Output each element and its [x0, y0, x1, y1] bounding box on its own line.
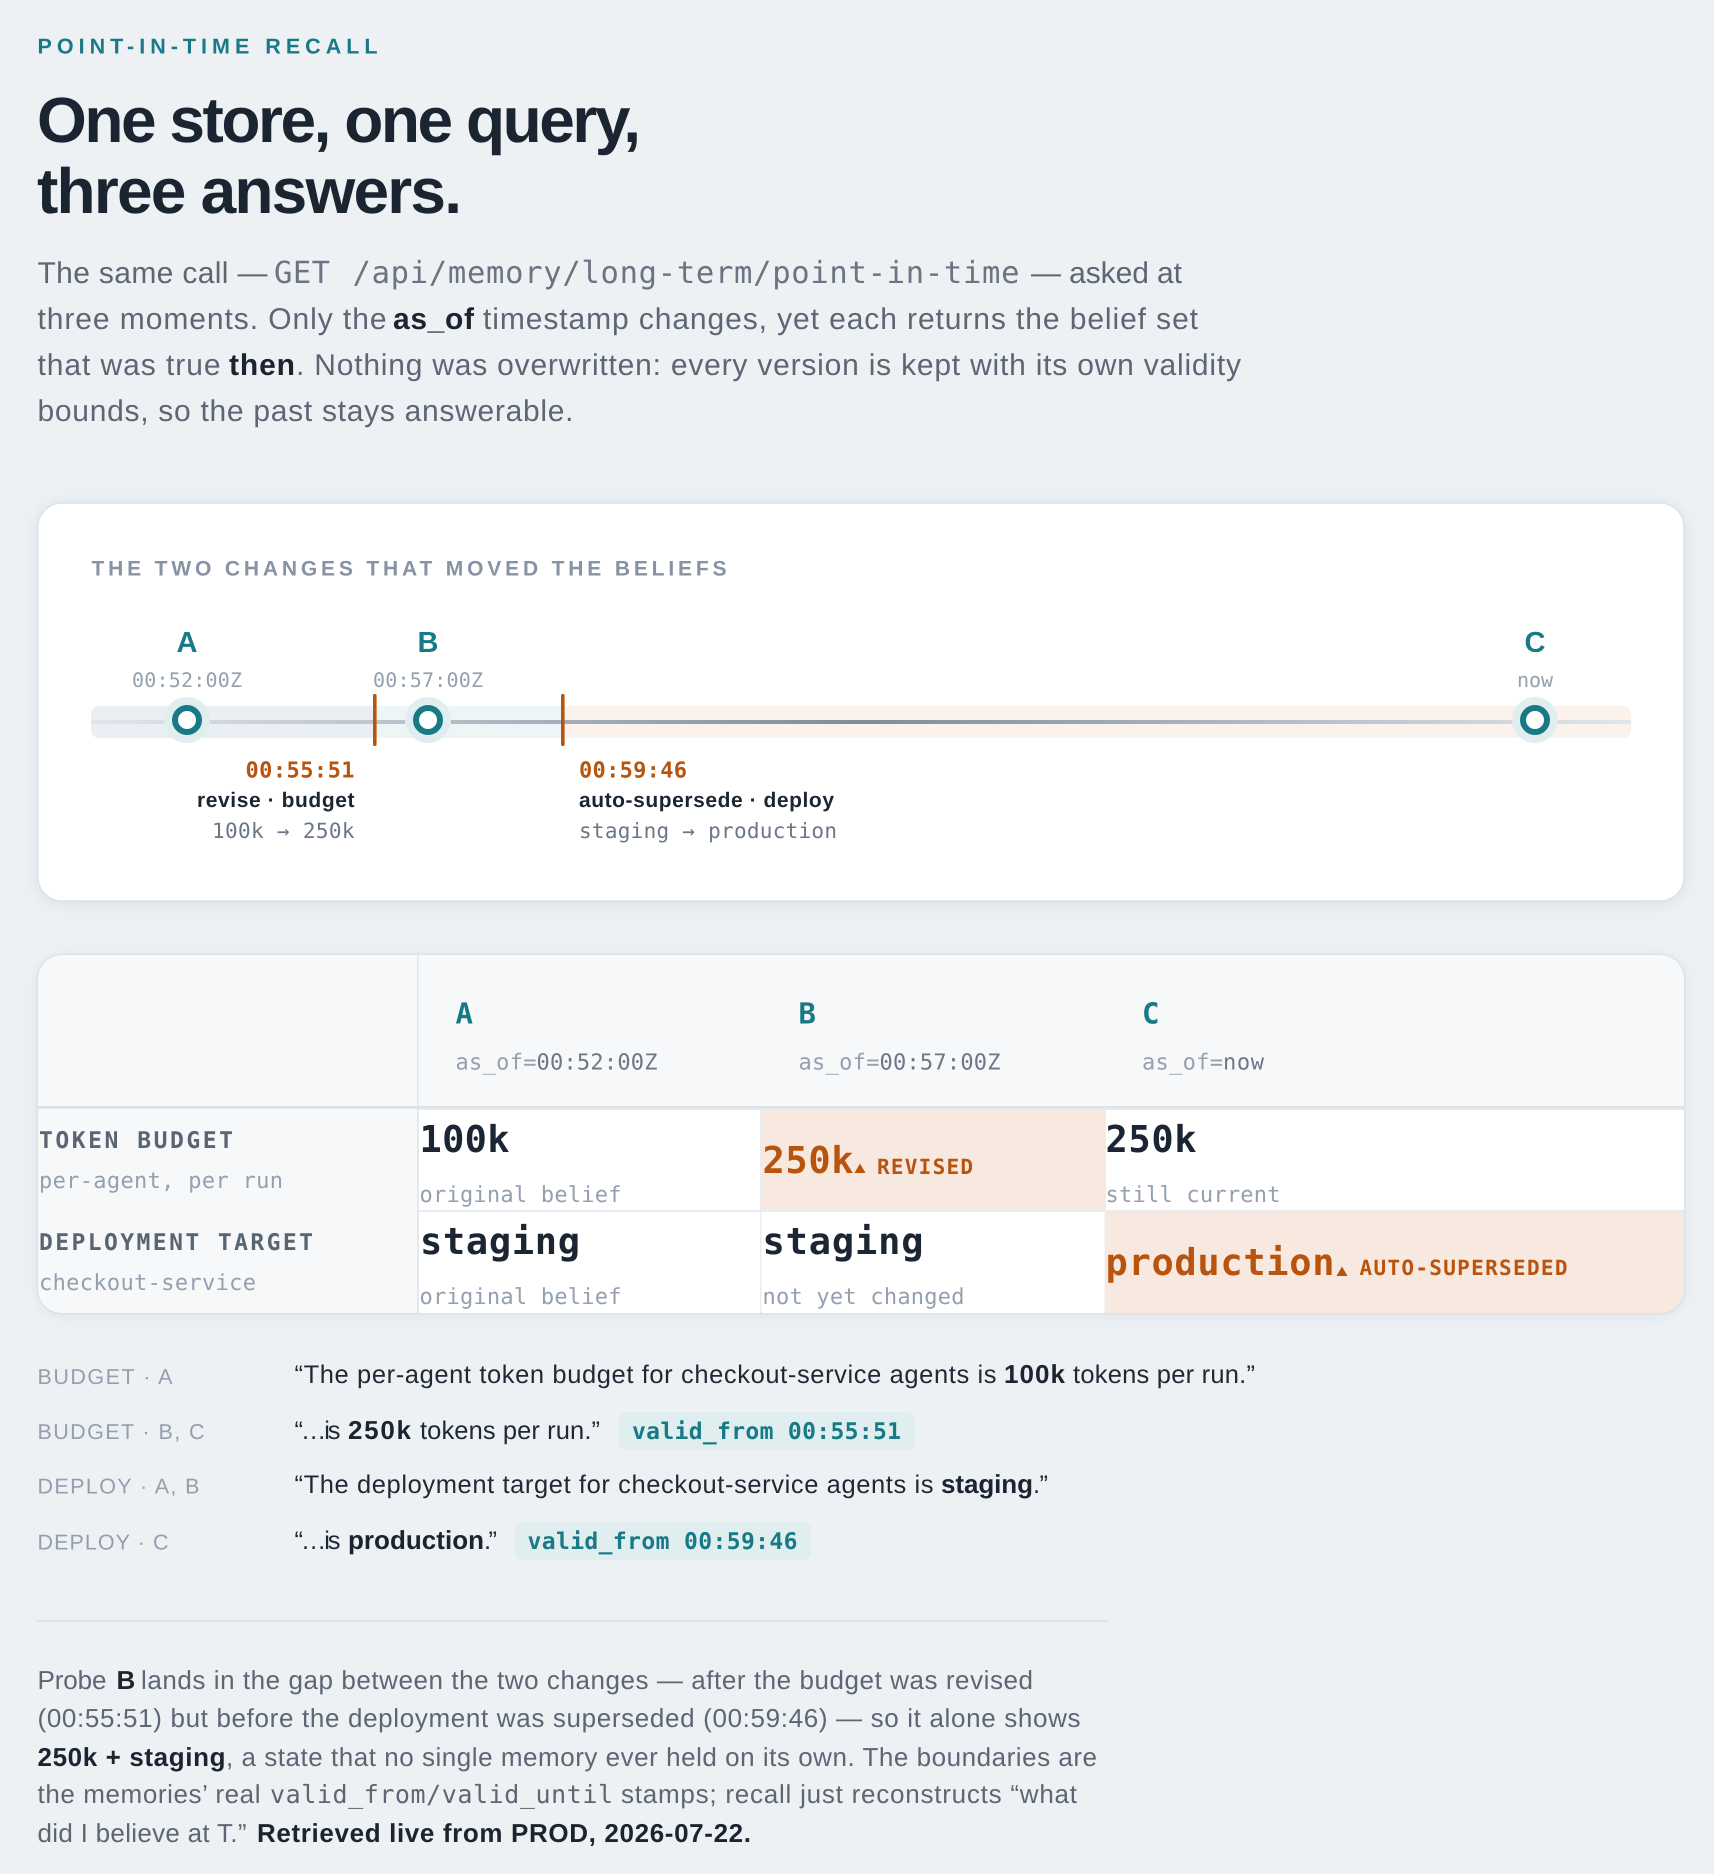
statement: budget A: [38, 1359, 1255, 1389]
row label: token budget: per-agent, per run: [39, 1169, 283, 1194]
column header C: C: [1142, 996, 1159, 1030]
column header B: B: [798, 996, 816, 1030]
closing note: (00:55:51) but before the deployment was superseded (00:59:46) — so it alone shows: [38, 1703, 1080, 1733]
statement: deploy C: “…is: [294, 1527, 340, 1555]
column header A: A: [456, 996, 473, 1030]
statement: budget B, C: [38, 1412, 916, 1450]
statement: deploy A, B: “The deployment target for checkout-service agents is: [294, 1471, 934, 1499]
panel: comparison table: [38, 955, 1684, 1313]
event label: budget revision: 00:55:51: [246, 758, 354, 784]
column header A: as_of=: [456, 1050, 536, 1076]
cell: deploy C auto-superseded: AUTO-SUPERSEDED: [1360, 1256, 1568, 1280]
column header C: now: [1223, 1050, 1265, 1076]
belief statements list: [38, 1359, 1255, 1560]
column header A: 00:52:00Z: [536, 1050, 658, 1076]
closing note: 250k + staging: [38, 1742, 226, 1772]
statement: deploy C: .”: [484, 1527, 497, 1555]
event label: budget revision: 100k → 250k: [212, 819, 355, 843]
column header B: [798, 996, 1000, 1076]
event label: deployment supersede: [579, 758, 837, 843]
intro paragraph: GET: [274, 256, 330, 291]
closing note: B: [116, 1665, 135, 1695]
column header C: as_of=: [1142, 1050, 1223, 1076]
probe C: [1512, 627, 1558, 743]
probe C: C: [1525, 627, 1546, 659]
cell: budget B revised: REVISED: [877, 1155, 973, 1179]
intro paragraph: The same call —: [38, 257, 268, 290]
cell: budget C: [1106, 1118, 1280, 1208]
event label: deployment supersede: staging → production: [579, 819, 837, 843]
closing note: valid_from/valid_until: [270, 1780, 613, 1809]
timeline heading: THE TWO CHANGES THAT MOVED THE BELIEFS: [92, 558, 726, 580]
title: three answers.: [37, 155, 462, 227]
closing note: the memories’ real: [38, 1779, 260, 1809]
cell: deploy B: staging: [762, 1220, 924, 1263]
statement: budget A: “The per-agent token budget for checkout-service agents is: [294, 1361, 996, 1389]
intro paragraph: that was true: [38, 349, 220, 382]
statement: deploy A, B: DEPLOY · A, B: [38, 1474, 200, 1498]
probe A: A: [177, 627, 198, 659]
intro paragraph: — asked at: [1031, 257, 1183, 290]
cell: deploy B: not yet changed: [762, 1285, 964, 1310]
row label: token budget: TOKEN BUDGET: [39, 1128, 233, 1154]
cell: budget B revised: 250k: [762, 1139, 854, 1182]
statement: deploy C: DEPLOY · C: [38, 1530, 168, 1554]
cell: budget A: original belief: [420, 1183, 622, 1208]
panel: timeline card: [38, 503, 1684, 901]
closing note: , a state that no single memory ever held on its own. The boundaries are: [226, 1742, 1097, 1772]
cell: deploy A: [420, 1220, 622, 1310]
statement: deploy A, B: [38, 1469, 1048, 1499]
row label: token budget: [39, 1128, 283, 1194]
cell: deploy B: [762, 1220, 964, 1310]
statement: budget B, C: 250k: [348, 1415, 412, 1445]
intro paragraph: bounds, so the past stays answerable.: [38, 395, 574, 428]
eyebrow: POINT-IN-TIME RECALL: [38, 34, 378, 58]
cell: deploy C auto-superseded: production: [1106, 1241, 1334, 1284]
intro paragraph: as_of: [393, 303, 475, 336]
statement: deploy A, B: staging: [941, 1469, 1033, 1499]
event label: budget revision: [197, 758, 355, 843]
closing note: Retrieved live from PROD, 2026-07-22.: [257, 1818, 751, 1848]
statement: budget A: 100k: [1004, 1359, 1066, 1389]
row label: deployment target: checkout-service: [39, 1271, 256, 1296]
statement: deploy C: production: [348, 1525, 484, 1555]
statement: deploy C: [38, 1522, 812, 1560]
timeline track with validity segments: [91, 706, 1631, 738]
intro paragraph: [38, 256, 1241, 428]
intro paragraph: /api/memory/long-term/point-in-time: [352, 256, 1020, 291]
event label: deployment supersede: 00:59:46: [579, 758, 687, 784]
probe A: [132, 627, 242, 743]
intro paragraph: . Nothing was overwritten: every version is kept with its own validity: [296, 349, 1241, 382]
column header A: [456, 996, 658, 1076]
cell: budget C: still current: [1106, 1183, 1280, 1208]
closing note: [38, 1665, 1097, 1848]
column header B: 00:57:00Z: [880, 1050, 1000, 1076]
intro paragraph: three moments. Only the: [38, 303, 386, 336]
table backgrounds and cells: [38, 955, 1684, 1313]
cell: deploy C auto-superseded: [1106, 1241, 1568, 1284]
column header C: [1142, 996, 1265, 1076]
probe B: 00:57:00Z: [373, 668, 483, 692]
statement: budget A: tokens per run.”: [1073, 1361, 1255, 1389]
title: [37, 84, 641, 227]
statement: budget B, C: BUDGET · B, C: [38, 1420, 204, 1444]
probe B: [373, 627, 483, 743]
statement: budget B, C: tokens per run.”: [420, 1417, 600, 1445]
closing note: stamps; recall just reconstructs “what: [621, 1779, 1078, 1809]
row label: deployment target: DEPLOYMENT TARGET: [39, 1230, 313, 1256]
closing note: lands in the gap between the two changes — after the budget was revised: [141, 1665, 1033, 1695]
cell: budget A: [420, 1118, 622, 1208]
cell: budget B revised: [762, 1139, 973, 1182]
closing note: Probe: [38, 1665, 106, 1695]
statement: deploy C: valid_from 00:59:46: [528, 1529, 798, 1555]
closing note: did I believe at T.”: [38, 1818, 246, 1848]
event label: deployment supersede: auto-supersede · deploy: [579, 789, 834, 812]
event label: budget revision: revise · budget: [197, 789, 354, 812]
column header B: as_of=: [798, 1050, 880, 1076]
cell: deploy A: staging: [420, 1220, 580, 1263]
row label: deployment target: [39, 1230, 313, 1296]
cell: budget C: 250k: [1106, 1118, 1196, 1161]
probe A: 00:52:00Z: [132, 668, 242, 692]
probe C: now: [1517, 668, 1554, 692]
probe B: B: [418, 627, 438, 659]
intro paragraph: timestamp changes, yet each returns the belief set: [483, 303, 1199, 336]
change marker 00:55:51: [373, 694, 377, 746]
cell: deploy A: original belief: [420, 1285, 622, 1310]
statement: budget B, C: “…is: [294, 1417, 340, 1445]
title: One store, one query,: [37, 84, 641, 156]
statement: budget A: BUDGET · A: [38, 1365, 173, 1389]
statement: deploy A, B: .”: [1033, 1471, 1048, 1499]
statement: budget B, C: valid_from 00:55:51: [632, 1419, 901, 1445]
cell: budget A: 100k: [420, 1118, 510, 1161]
change marker 00:59:46: [561, 694, 565, 746]
intro paragraph: then: [229, 349, 295, 382]
